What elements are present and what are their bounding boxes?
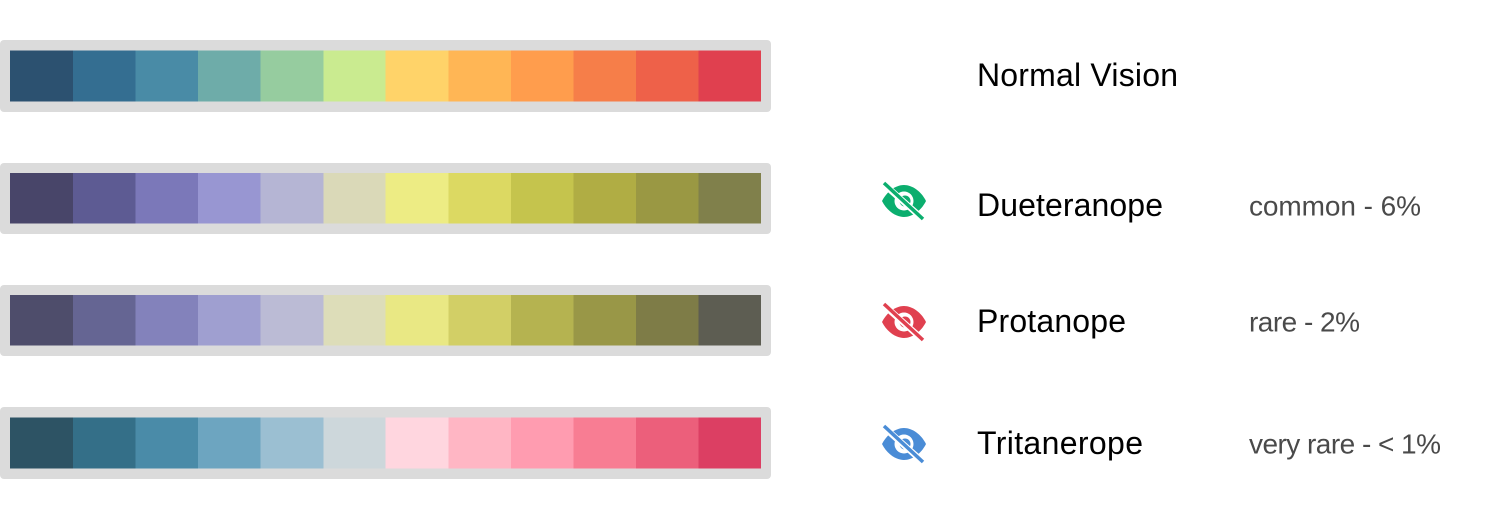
label: dueteranope: Dueteranope — [977, 187, 1163, 223]
icon: green crossed-out eye — [882, 183, 926, 219]
icon: red crossed-out eye — [882, 304, 926, 340]
note: very rare under 1%: very rare - < 1% — [1249, 428, 1441, 460]
palette bar: normal vision — [0, 40, 771, 112]
icon: blue crossed-out eye — [882, 426, 926, 462]
label: tritanerope: Tritanerope — [977, 425, 1143, 461]
palette bar: protanope — [0, 285, 771, 356]
note: rare 2%: rare - 2% — [1249, 306, 1360, 338]
palette bar: tritanerope — [0, 407, 771, 479]
label: protanope: Protanope — [977, 303, 1126, 339]
note: common 6%: common - 6% — [1249, 190, 1421, 222]
palette bar: dueteranope — [0, 163, 771, 234]
heading: normal vision: Normal Vision — [977, 57, 1178, 93]
